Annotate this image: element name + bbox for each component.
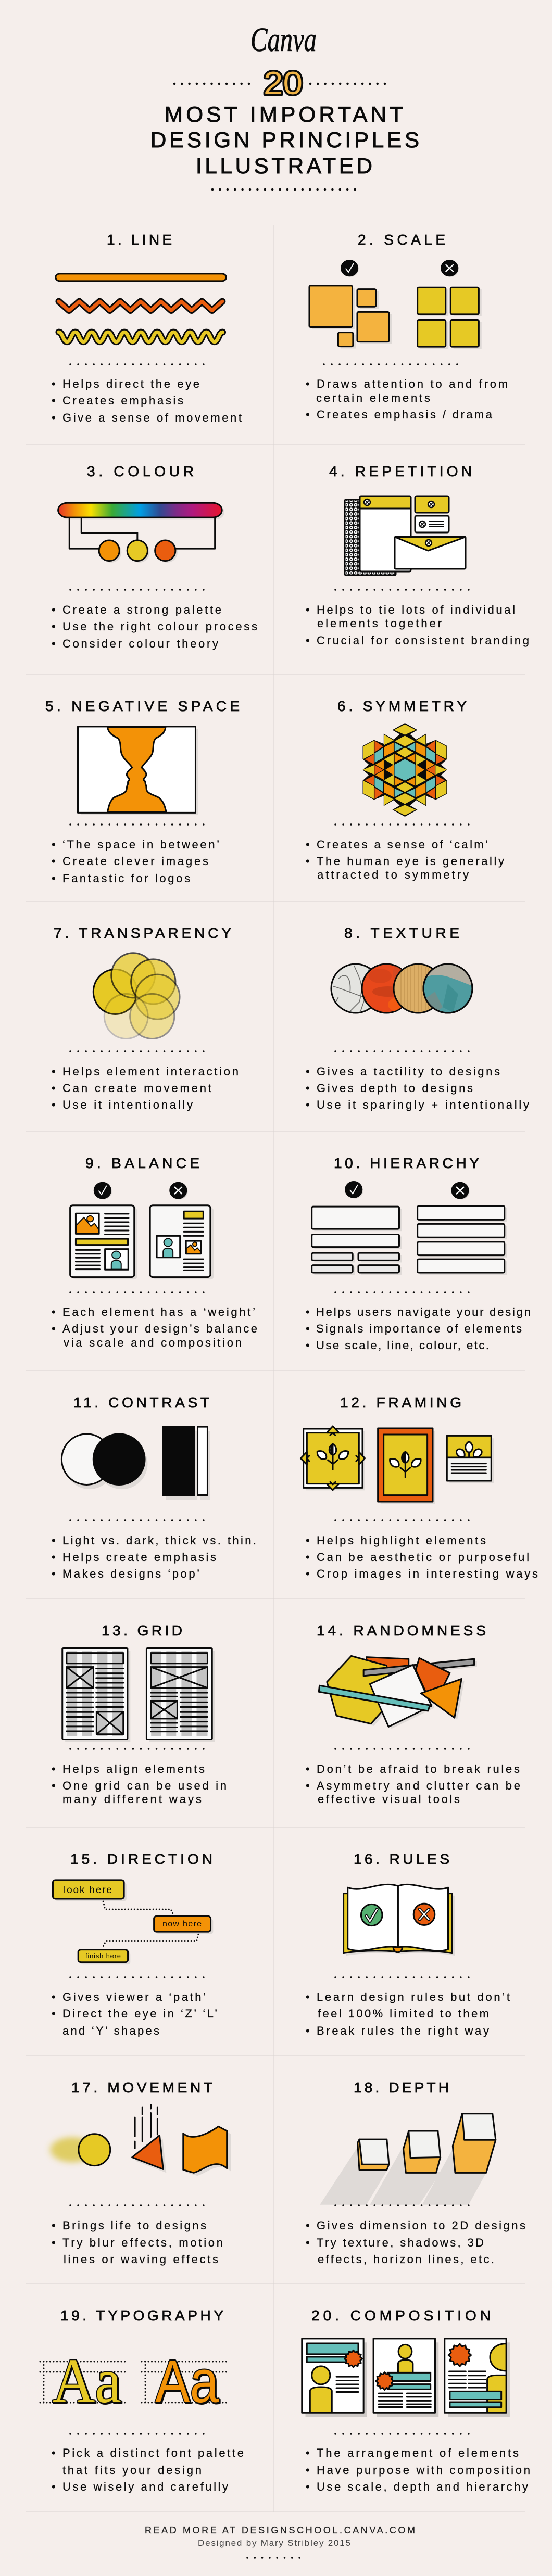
- bullet list: •: [306, 408, 310, 421]
- bullet list: •: [306, 1322, 310, 1335]
- bullet list: Helps create emphasis: [62, 1551, 216, 1564]
- panel: 12. Framing: [300, 1394, 538, 1580]
- bullet list: •: [306, 1551, 310, 1564]
- bullet list: Can be aesthetic or purposeful: [317, 1551, 529, 1564]
- bullet list: •: [306, 377, 310, 390]
- bullet list: Helps to tie lots of individual: [317, 603, 515, 616]
- bullet list: Have purpose with composition: [317, 2464, 530, 2477]
- bullet list: •: [52, 872, 56, 885]
- logo: Canva: Canva: [250, 21, 317, 59]
- bullet list: Gives dimension to 2D designs: [317, 2219, 525, 2232]
- bullet list: One grid can be used in: [62, 1779, 227, 1792]
- bullet list: Use it sparingly + intentionally: [317, 1098, 529, 1111]
- bullet list: certain elements: [316, 391, 430, 404]
- panel: 11. Contrast: [52, 1394, 256, 1580]
- bullet list: Creates a sense of ‘calm’: [317, 838, 488, 851]
- bullet list: [52, 2219, 223, 2266]
- bullet list: •: [306, 2236, 310, 2249]
- title: MOST IMPORTANT: [165, 102, 403, 126]
- bullet list: that fits your design: [62, 2464, 202, 2477]
- bullet list: Brings life to designs: [62, 2219, 206, 2232]
- panel: 10. Hierarchy: [306, 1155, 531, 1352]
- icon: hierarchy layouts: [312, 1182, 507, 1275]
- bullet list: feel 100% limited to them: [318, 2007, 489, 2020]
- bullet list: Draws attention to and from: [317, 377, 508, 390]
- bullet list: [52, 1762, 227, 1806]
- panel: 18. Depth: [306, 2079, 525, 2266]
- panel: 4. Repetition: [306, 463, 529, 647]
- icon: framed artworks: [300, 1426, 494, 1504]
- panel: 2. Scale: [306, 232, 508, 421]
- bullet list: [306, 2446, 530, 2493]
- bullet list: Crucial for consistent branding: [317, 634, 529, 647]
- bullet list: •: [306, 1567, 310, 1580]
- icon: scale squares: [309, 261, 482, 349]
- footer credit: [145, 2525, 415, 2548]
- bullet list: Use it intentionally: [62, 1098, 193, 1111]
- bullet list: Use wisely and carefully: [62, 2480, 228, 2493]
- bullet list: [52, 1534, 256, 1580]
- heading: 6. Symmetry: 6. SYMMETRY: [337, 698, 467, 714]
- panel: 9. Balance: [52, 1155, 257, 1349]
- bullet list: •: [52, 1082, 56, 1095]
- icon: serif and sans type specimens: [40, 2346, 229, 2416]
- icon: grid layouts: [62, 1648, 215, 1742]
- bullet list: Asymmetry and clutter can be: [317, 1779, 520, 1792]
- bullet list: elements together: [317, 617, 442, 630]
- bullet list: •: [52, 377, 56, 390]
- bullet list: •: [52, 855, 56, 868]
- heading: 11. Contrast: 11. CONTRAST: [73, 1394, 209, 1411]
- bullet list: •: [52, 1990, 56, 2003]
- panel: 16. Rules: [306, 1851, 510, 2037]
- icon: overlapping transparent circles: [93, 953, 180, 1039]
- bullet list: effective visual tools: [318, 1793, 460, 1806]
- icon: serif and sans type specimens: Aa: [52, 2346, 121, 2416]
- heading: 4. Repetition: 4. REPETITION: [329, 463, 472, 479]
- bullet list: Helps direct the eye: [62, 377, 199, 390]
- bullet list: •: [306, 1339, 310, 1352]
- bullet list: •: [306, 855, 310, 868]
- bullet list: Creates emphasis: [62, 394, 183, 407]
- bullet list: Crop images in interesting ways: [317, 1567, 538, 1580]
- footer credit: Designed by Mary Stribley 2015: [198, 2538, 350, 2548]
- bullet list: Direct the eye in ‘Z’ ‘L’: [62, 2007, 217, 2020]
- bullet list: Adjust your design’s balance: [62, 1322, 257, 1335]
- bullet list: •: [52, 2219, 56, 2232]
- bullet list: Learn design rules but don’t: [317, 1990, 510, 2003]
- bullet list: •: [306, 2464, 310, 2477]
- bullet list: Try texture, shadows, 3D: [317, 2236, 484, 2249]
- bullet list: via scale and composition: [64, 1336, 242, 1349]
- bullet list: Signals importance of elements: [316, 1322, 522, 1335]
- icon: direction path: now here: [162, 1920, 202, 1928]
- bullet list: •: [306, 1534, 310, 1547]
- bullet list: [306, 1534, 538, 1580]
- bullet list: effects, horizon lines, etc.: [318, 2253, 494, 2266]
- bullet list: •: [52, 1098, 56, 1111]
- bullet list: Gives depth to designs: [317, 1082, 473, 1095]
- bullet list: [306, 377, 508, 421]
- bullet list: •: [52, 394, 56, 407]
- bullet list: •: [52, 1322, 56, 1335]
- bullet list: •: [306, 838, 310, 851]
- bullet list: [52, 1065, 239, 1111]
- bullet list: Helps align elements: [62, 1762, 205, 1775]
- bullet list: Consider colour theory: [62, 637, 218, 650]
- bullet list: •: [52, 1551, 56, 1564]
- bullet list: •: [306, 2446, 310, 2459]
- icon: balanced and unbalanced layouts: [70, 1183, 214, 1279]
- icon: direction path: [53, 1880, 213, 1964]
- bullet list: •: [52, 603, 56, 616]
- bullet list: Create clever images: [62, 855, 208, 868]
- heading: 14. Randomness: 14. RANDOMNESS: [317, 1622, 486, 1639]
- bullet list: and ‘Y’ shapes: [62, 2024, 159, 2037]
- bullet list: •: [306, 1082, 310, 1095]
- bullet list: •: [306, 603, 310, 616]
- icon: contrast shapes: [61, 1427, 210, 1500]
- icon: open rule book: [344, 1884, 455, 1956]
- bullet list: The human eye is generally: [317, 855, 504, 868]
- panel: 6. Symmetry: [306, 698, 504, 881]
- heading: 2. Scale: 2. SCALE: [358, 232, 445, 248]
- panel: 13. Grid: [52, 1622, 227, 1806]
- bullet list: [306, 1990, 510, 2037]
- bullet list: •: [52, 838, 56, 851]
- bullet list: [52, 2446, 244, 2493]
- panel: 8. Texture: [306, 925, 529, 1111]
- heading: 1. Line: 1. LINE: [107, 232, 172, 248]
- bullet list: •: [52, 1762, 56, 1775]
- heading: 9. Balance: 9. BALANCE: [85, 1155, 199, 1171]
- bullet list: Each element has a ‘weight’: [62, 1305, 255, 1318]
- bullet list: Pick a distinct font palette: [62, 2446, 244, 2459]
- heading: 15. Direction: 15. DIRECTION: [70, 1851, 212, 1867]
- bullet list: •: [52, 637, 56, 650]
- panel: 17. Movement: [51, 2079, 231, 2266]
- icon: vase and faces: [78, 727, 198, 815]
- bullet list: •: [306, 2024, 310, 2037]
- heading: 13. Grid: 13. GRID: [102, 1622, 182, 1639]
- bullet list: many different ways: [62, 1793, 202, 1806]
- panel: 14. Randomness: [306, 1622, 520, 1806]
- bullet list: [52, 1990, 217, 2037]
- bullet list: Use scale, depth and hierarchy: [317, 2480, 528, 2493]
- bullet list: [52, 1305, 257, 1349]
- heading: 18. Depth: 18. DEPTH: [354, 2079, 449, 2096]
- panel: 5. Negative Space: [45, 698, 240, 885]
- bullet list: Gives a tactility to designs: [317, 1065, 500, 1078]
- icon: moving shapes: [51, 2104, 231, 2176]
- panel: 1. Line: [52, 232, 242, 424]
- bullet list: Don’t be afraid to break rules: [317, 1762, 520, 1775]
- bullet list: The arrangement of elements: [317, 2446, 519, 2459]
- panel: 15. Direction: [52, 1851, 217, 2037]
- title: ILLUSTRATED: [196, 154, 372, 178]
- numeral: 20: 20: [264, 66, 303, 101]
- bullet list: Helps highlight elements: [317, 1534, 486, 1547]
- panel: 7. Transparency: [52, 925, 239, 1111]
- bullet list: •: [52, 411, 56, 424]
- bullet list: [306, 1762, 520, 1806]
- bullet list: [306, 2219, 525, 2266]
- bullet list: Use the right colour process: [62, 620, 257, 633]
- bullet list: [306, 1065, 529, 1111]
- bullet list: [52, 838, 219, 885]
- bullet list: •: [52, 1305, 56, 1318]
- heading: 3. Colour: 3. COLOUR: [87, 463, 194, 479]
- panel: 3. Colour: [52, 463, 257, 650]
- panel: 20. Composition: [302, 2307, 530, 2493]
- bullet list: Makes designs ‘pop’: [62, 1567, 199, 1580]
- bullet list: [306, 603, 529, 647]
- bullet list: •: [306, 1779, 310, 1792]
- bullet list: •: [306, 2219, 310, 2232]
- bullet list: [306, 838, 504, 881]
- icon: depth cubes: [320, 2114, 496, 2205]
- bullet list: •: [306, 2480, 310, 2493]
- heading: 10. Hierarchy: 10. HIERARCHY: [334, 1155, 479, 1171]
- bullet list: Break rules the right way: [317, 2024, 489, 2037]
- title: DESIGN PRINCIPLES: [150, 128, 419, 152]
- bullet list: •: [306, 634, 310, 647]
- bullet list: •: [306, 1305, 310, 1318]
- bullet list: Helps element interaction: [62, 1065, 239, 1078]
- heading: 16. Rules: 16. RULES: [354, 1851, 449, 1867]
- bullet list: •: [52, 2007, 56, 2020]
- heading: 17. Movement: 17. MOVEMENT: [71, 2079, 212, 2096]
- icon: colour spectrum and swatches: [58, 503, 224, 563]
- icon: symmetrical mosaic: [363, 723, 447, 817]
- heading: 7. Transparency: 7. TRANSPARENCY: [54, 925, 231, 941]
- bullet list: Creates emphasis / drama: [317, 408, 493, 421]
- footer credit: READ MORE AT DESIGNSCHOOL.CANVA.COM: [145, 2525, 415, 2535]
- icon: branded stationery: [345, 496, 466, 575]
- bullet list: attracted to symmetry: [317, 868, 469, 881]
- bullet list: •: [306, 1098, 310, 1111]
- icon: composition layouts: [302, 2339, 510, 2417]
- bullet list: •: [52, 1567, 56, 1580]
- panel: 19. Typography: [40, 2307, 244, 2493]
- bullet list: •: [52, 1779, 56, 1792]
- bullet list: Give a sense of movement: [62, 411, 242, 424]
- heading: 5. Negative Space: 5. NEGATIVE SPACE: [45, 698, 240, 714]
- icon: three lines: [56, 274, 226, 342]
- heading: 12. Framing: 12. FRAMING: [340, 1394, 461, 1411]
- bullet list: Fantastic for logos: [62, 872, 190, 885]
- bullet list: Create a strong palette: [62, 603, 221, 616]
- heading: 19. Typography: 19. TYPOGRAPHY: [60, 2307, 223, 2324]
- title: [150, 102, 419, 178]
- bullet list: Try blur effects, motion: [62, 2236, 223, 2249]
- bullet list: [306, 1305, 531, 1352]
- bullet list: •: [52, 620, 56, 633]
- bullet list: Helps users navigate your design: [316, 1305, 531, 1318]
- bullet list: •: [52, 2446, 56, 2459]
- icon: serif and sans type specimens: Aa: [155, 2347, 219, 2415]
- heading: 20. Composition: 20. COMPOSITION: [311, 2307, 491, 2324]
- bullet list: Can create movement: [62, 1082, 211, 1095]
- bullet list: •: [306, 1065, 310, 1078]
- bullet list: •: [52, 1065, 56, 1078]
- bullet list: •: [52, 2480, 56, 2493]
- heading: 8. Texture: 8. TEXTURE: [344, 925, 459, 941]
- bullet list: •: [306, 1990, 310, 2003]
- bullet list: •: [52, 2236, 56, 2249]
- bullet list: •: [306, 1762, 310, 1775]
- bullet list: Use scale, line, colour, etc.: [316, 1339, 489, 1352]
- icon: textured circles: [331, 963, 474, 1015]
- bullet list: [52, 603, 257, 650]
- bullet list: ‘The space in between’: [62, 838, 219, 851]
- bullet list: •: [52, 1534, 56, 1547]
- icon: direction path: look here: [64, 1885, 112, 1896]
- bullet list: Gives viewer a ‘path’: [62, 1990, 206, 2003]
- bullet list: lines or waving effects: [64, 2253, 218, 2266]
- icon: random cluttered shapes: [319, 1656, 477, 1729]
- bullet list: Light vs. dark, thick vs. thin.: [62, 1534, 256, 1547]
- bullet list: [52, 377, 242, 424]
- icon: direction path: finish here: [85, 1952, 121, 1960]
